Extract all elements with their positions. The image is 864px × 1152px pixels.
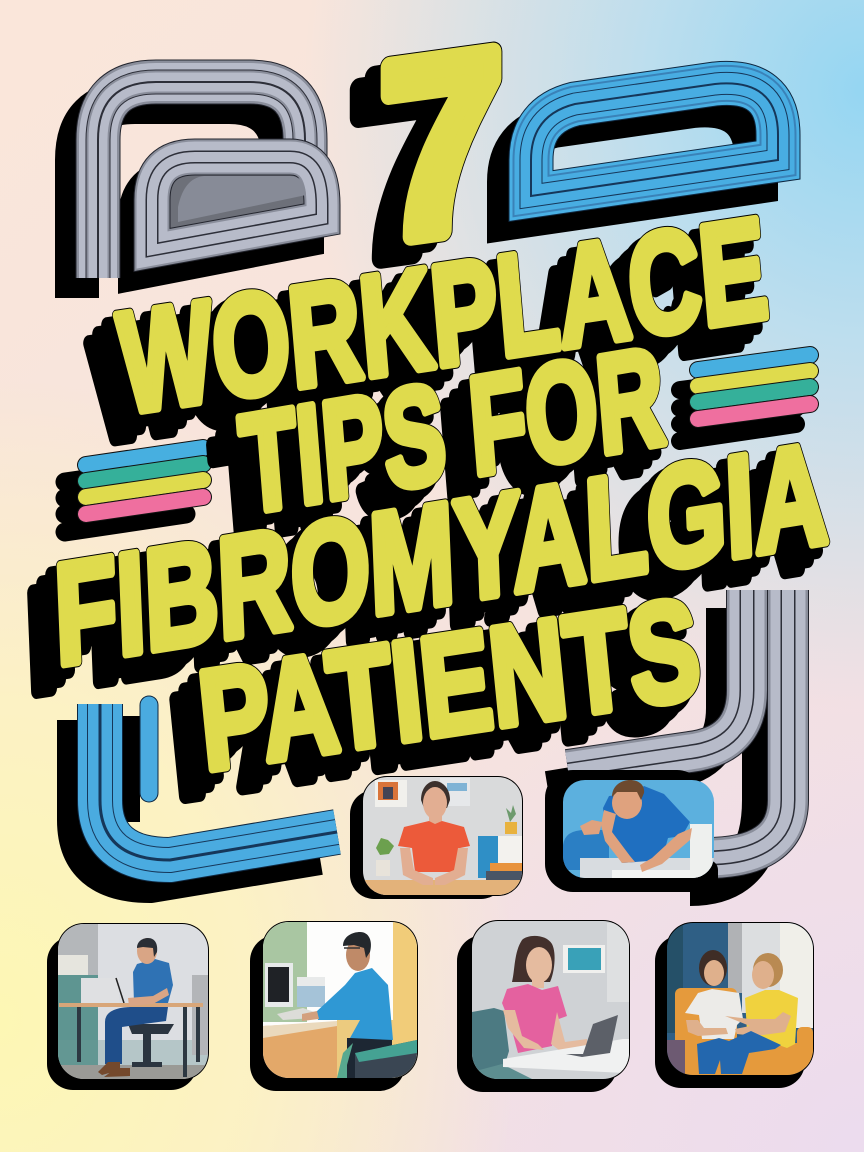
heading line: TIPS FOR: TIPS FOR — [217, 337, 651, 561]
number 7: 7 — [365, 8, 487, 304]
photo: man typing at computer — [250, 921, 418, 1091]
heading line: PATIENTS: PATIENTS — [192, 568, 706, 800]
decorative strip: blue loop top right — [509, 83, 778, 218]
heading line: TIPS FOR: TIPS FOR — [208, 346, 642, 570]
heading line: PATIENTS: PATIENTS — [183, 577, 697, 809]
number 7: 7 — [380, 0, 502, 294]
number 7: 7 — [380, 0, 502, 294]
heading line: PATIENTS: PATIENTS — [174, 586, 688, 818]
photo: two women on orange sofa — [655, 922, 814, 1088]
heading line: TIPS FOR — [208, 319, 669, 570]
decorative strip: gray J right — [548, 590, 788, 885]
photo: woman in pink shirt on laptop — [457, 920, 630, 1092]
photo: man in blue shirt leaning over desk — [545, 770, 718, 892]
number 7: 7 — [350, 20, 472, 316]
photo: man at desk with laptop — [47, 923, 209, 1090]
decorative strip: blue L bottom left — [80, 704, 337, 880]
colored bars top right — [680, 355, 810, 441]
heading line: TIPS FOR: TIPS FOR — [226, 328, 660, 552]
photo: woman in red shirt at desk — [350, 776, 523, 899]
heading line: PATIENTS: PATIENTS — [192, 568, 706, 800]
decorative strip: gray double arch top left — [77, 82, 322, 298]
heading line: PATIENTS: PATIENTS — [165, 595, 679, 827]
title — [25, 0, 830, 827]
colored bars left — [65, 448, 203, 532]
